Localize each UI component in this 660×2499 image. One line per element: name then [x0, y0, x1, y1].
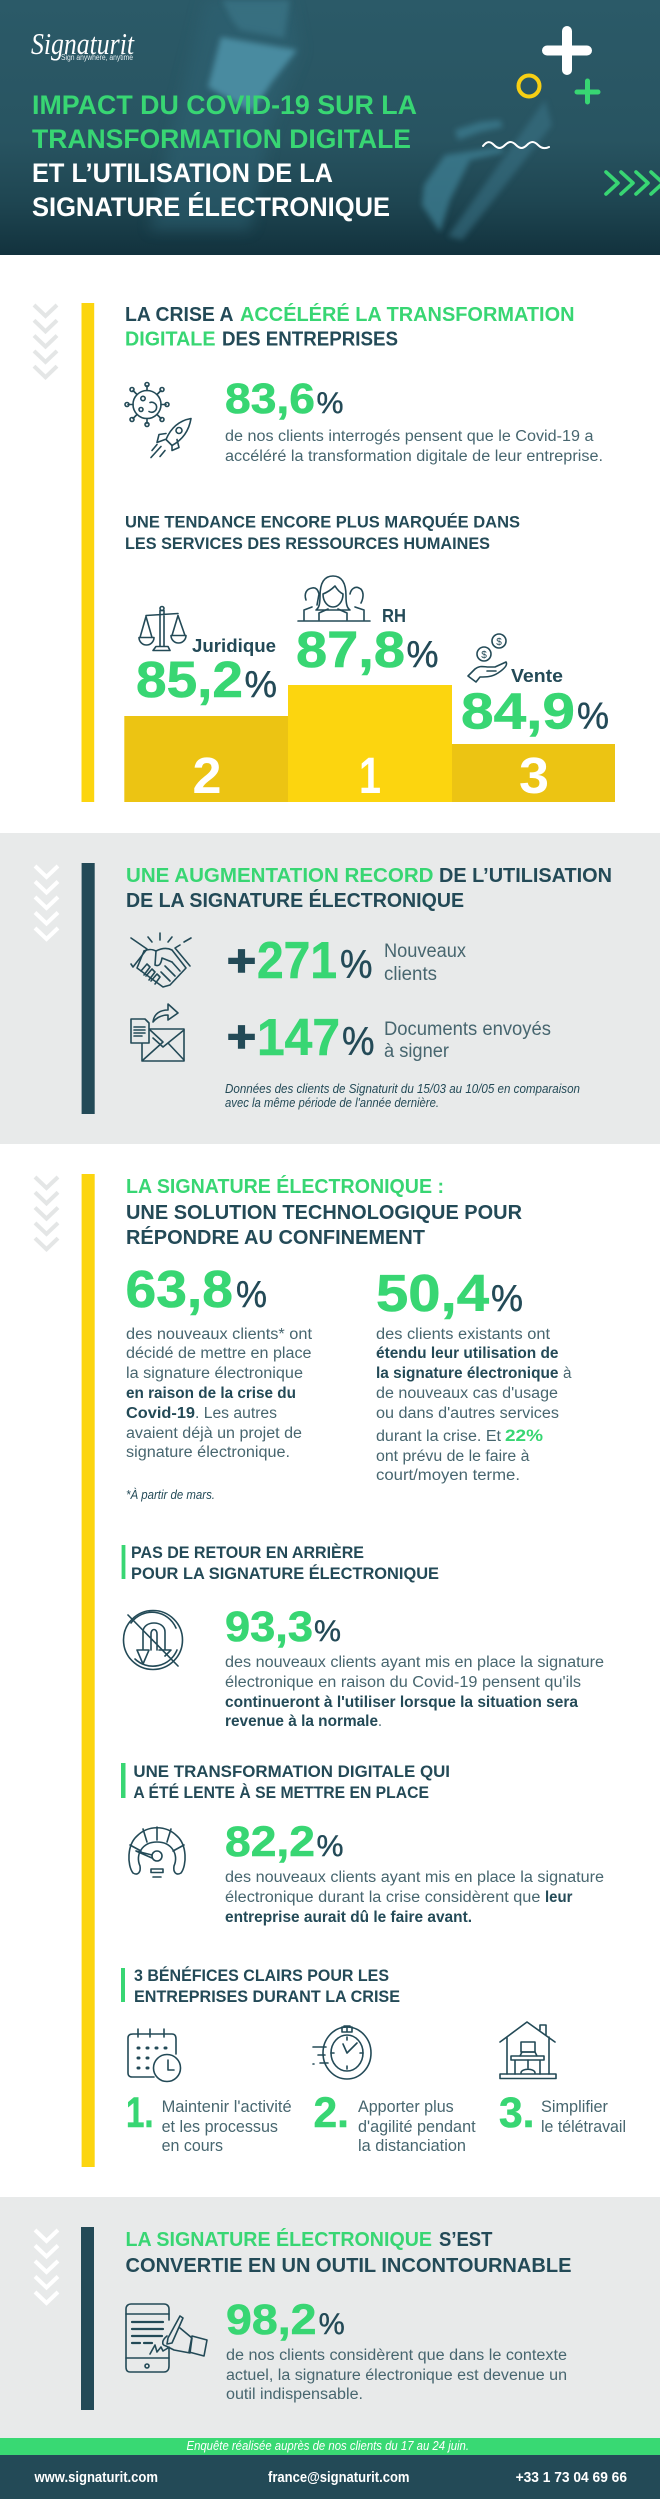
stat: 83,6%: % — [316, 387, 344, 420]
subheading: ressources humaines: LES SERVICES DES RESSOURCES HUMAINES — [125, 534, 490, 553]
stat: 83,6%: 83,6 — [225, 375, 315, 423]
subheading: pas de retour: POUR LA SIGNATURE ÉLECTRONIQUE — [131, 1564, 439, 1583]
heading: DIGITALE — [125, 328, 216, 350]
icon: calendar — [128, 2029, 180, 2082]
heading — [126, 1175, 522, 1249]
footer: +33 1 73 04 69 66 — [516, 2470, 627, 2486]
stat: 93,3%: continueront à l'utiliser lorsque la situation sera — [225, 1694, 578, 1711]
stat: 50,4%: des clients existants ont — [376, 1326, 551, 1343]
podium step 2: 2 — [192, 747, 222, 804]
value: juridique: 85,2 — [136, 651, 243, 708]
stat: 63,8%: en raison de la crise du — [126, 1385, 296, 1402]
heading: DES ENTREPRISES — [222, 328, 398, 350]
stat: 93,3% — [225, 1603, 604, 1730]
value: juridique: % — [244, 664, 277, 705]
stat: 93,3%: . — [378, 1713, 382, 1730]
value: juridique: Juridique — [192, 636, 276, 656]
title: TRANSFORMATION DIGITALE — [32, 124, 411, 154]
accent bar — [82, 1174, 95, 2167]
stat: +147% documents: à signer — [384, 1041, 450, 1062]
accent bar — [81, 2227, 94, 2410]
heading: LA CRISE A — [125, 303, 234, 326]
icon: tablet and signing hand — [126, 2304, 207, 2372]
icon: coins and hand — [468, 634, 507, 682]
stat: +147% documents — [227, 1009, 551, 1067]
value: vente: Vente — [511, 666, 563, 686]
stat: 50,4%: à — [563, 1365, 572, 1382]
stat: +147% documents: 147 — [257, 1009, 340, 1067]
value: RH: RH — [382, 606, 406, 626]
benefit 1: 1. — [126, 2089, 154, 2137]
benefit 1 — [126, 2029, 292, 2155]
value: RH: % — [406, 634, 438, 675]
footer — [0, 2455, 660, 2499]
stat: 98,2% — [226, 2296, 567, 2403]
value: juridique — [136, 636, 277, 708]
logo: Signaturit: Sign anywhere, anytime — [61, 53, 133, 62]
subheading: 3 bénéfices: ENTREPRISES DURANT LA CRISE — [134, 1987, 400, 2006]
subheading: transformation lente: A ÉTÉ LENTE À SE METTRE EN PLACE — [133, 1783, 429, 1802]
benefit 1: et les processus — [162, 2118, 278, 2136]
stat: 63,8%: % — [236, 1274, 267, 1315]
subheading: pas de retour — [122, 1543, 439, 1583]
stat: 50,4%: 50,4 — [376, 1265, 489, 1323]
stat: +271% nouveaux clients: 271 — [257, 932, 337, 990]
stat: 50,4%: durant la crise. Et — [376, 1428, 502, 1445]
title: SIGNATURE ÉLECTRONIQUE — [32, 192, 390, 222]
benefit 2: la distanciation — [358, 2137, 466, 2155]
icon: stopwatch — [313, 2026, 371, 2079]
stat: 50,4% — [376, 1265, 572, 1484]
chevrons — [35, 1177, 58, 1249]
note — [225, 1082, 580, 1110]
stat: 98,2%: de nos clients considèrent que dans le contexte — [226, 2347, 567, 2364]
stat: 63,8%: *À partir de mars. — [126, 1487, 215, 1502]
chevrons — [34, 305, 57, 377]
stat: 93,3%: des nouveaux clients ayant mis en place la signature — [225, 1654, 604, 1671]
icon: coins and hand: $ — [481, 650, 487, 661]
stat: 50,4%: ou dans d'autres services — [376, 1405, 559, 1422]
heading — [126, 2228, 572, 2277]
icon: coins and hand: $ — [496, 637, 502, 648]
stat: 93,3%: revenue à la normale — [225, 1713, 378, 1730]
footer: www.signaturit.com — [34, 2470, 158, 2486]
band: survey note: Enquête réalisée auprès de nos clients du 17 au 24 juin. — [186, 2439, 469, 2453]
benefit 2: d'agilité pendant — [358, 2118, 476, 2136]
footer: france@signaturit.com — [268, 2470, 410, 2486]
podium step 2 — [124, 716, 288, 804]
title: IMPACT DU COVID-19 SUR LA — [32, 90, 417, 120]
heading: UNE SOLUTION TECHNOLOGIQUE POUR — [126, 1201, 522, 1224]
value: vente: % — [577, 696, 609, 736]
stat: +271% nouveaux clients — [227, 932, 466, 990]
text: 83,6% description — [225, 428, 603, 465]
stat: +271% nouveaux clients: + — [227, 936, 256, 986]
value: vente — [461, 666, 609, 740]
benefit 3: le télétravail — [541, 2118, 626, 2136]
icon: envelope and document — [131, 1004, 184, 1061]
subheading: 3 bénéfices — [121, 1966, 400, 2006]
photo: masked person with tablet — [150, 0, 552, 240]
benefit 2 — [313, 2026, 476, 2155]
stat: 50,4%: la signature électronique — [376, 1365, 559, 1382]
subheading: transformation lente: UNE TRANSFORMATION DIGITALE QUI — [133, 1762, 450, 1781]
benefit 3 — [499, 2022, 626, 2137]
stat: 98,2%: outil indispensable. — [226, 2386, 363, 2403]
heading: LA SIGNATURE ÉLECTRONIQUE — [126, 2228, 432, 2251]
stat: 50,4%: 22% — [505, 1426, 543, 1445]
stat: 50,4%: de nouveaux cas d'usage — [376, 1385, 558, 1402]
stat: 82,2%: % — [316, 1830, 344, 1863]
stat: 63,8%: signature électronique. — [126, 1444, 290, 1461]
icon: scales — [139, 606, 186, 650]
logo: Signaturit: Signaturit — [31, 26, 135, 61]
decoration: plus, ring, wave, chevrons — [483, 31, 660, 194]
stat: 98,2%: 98,2 — [226, 2296, 316, 2344]
benefit 3: Simplifier — [541, 2098, 608, 2116]
icon: virus and rocket — [125, 382, 191, 458]
stat: 82,2%: des nouveaux clients ayant mis en place la signature — [225, 1869, 604, 1886]
stat: 63,8%: la signature électronique — [126, 1365, 303, 1382]
heading — [126, 864, 612, 912]
subheading: transformation lente — [121, 1762, 450, 1802]
stat: +271% nouveaux clients: % — [340, 943, 372, 987]
stat: 93,3%: électronique en raison du Covid-19 pensent qu'ils — [225, 1674, 581, 1691]
stat: 98,2%: % — [319, 2308, 345, 2341]
stat: 50,4%: court/moyen terme. — [376, 1467, 520, 1484]
subheading: ressources humaines: UNE TENDANCE ENCORE PLUS MARQUÉE DANS — [125, 512, 520, 532]
stat: +271% nouveaux clients: clients — [384, 964, 437, 985]
panel: header banner — [0, 0, 660, 255]
subheading: ressources humaines — [125, 512, 520, 553]
stat: 63,8% — [126, 1261, 313, 1502]
benefit 1: en cours — [162, 2137, 223, 2155]
band: survey note — [0, 2438, 660, 2455]
heading: CONVERTIE EN UN OUTIL INCONTOURNABLE — [126, 2254, 572, 2277]
stat: +147% documents: % — [342, 1020, 374, 1064]
stat: 82,2%: leur — [545, 1889, 572, 1906]
value: RH: 87,8 — [296, 621, 405, 678]
stat: +271% nouveaux clients: Nouveaux — [384, 941, 466, 962]
stat: +147% documents: + — [227, 1012, 256, 1062]
stat: 50,4%: étendu leur utilisation de — [376, 1345, 559, 1362]
accent bar — [82, 863, 95, 1114]
heading: UNE AUGMENTATION RECORD — [126, 864, 434, 887]
icon: handshake — [131, 933, 191, 987]
panel: outil incontournable — [0, 2197, 660, 2438]
stat: 82,2%: 82,2 — [225, 1818, 315, 1866]
stat: 63,8%: Covid-19 — [126, 1405, 195, 1422]
accent bar — [82, 303, 94, 802]
benefit 1: Maintenir l'activité — [162, 2098, 292, 2116]
heading: DE L’UTILISATION — [439, 864, 612, 887]
heading: ACCÉLÉRÉ LA TRANSFORMATION — [240, 303, 574, 326]
benefit 3: 3. — [499, 2089, 534, 2137]
podium step 3: 3 — [519, 747, 549, 804]
note: Données des clients de Signaturit du 15/03 au 10/05 en comparaison — [225, 1082, 580, 1096]
note: avec la même période de l'année dernière. — [225, 1096, 439, 1110]
panel: la crise a accéléré — [34, 303, 615, 804]
icon: house with desk — [500, 2022, 556, 2078]
icon: people — [298, 576, 370, 621]
panel: solution technologique — [35, 1174, 626, 2167]
stat: 50,4%: % — [491, 1278, 523, 1319]
stat: 98,2%: actuel, la signature électronique est devenue un — [226, 2367, 567, 2384]
benefit 2: Apporter plus — [358, 2098, 454, 2116]
value: RH — [296, 606, 438, 678]
stat: 82,2% — [225, 1818, 604, 1926]
heading: DE LA SIGNATURE ÉLECTRONIQUE — [126, 889, 464, 912]
stat: +147% documents: Documents envoyés — [384, 1019, 551, 1040]
title — [32, 90, 417, 222]
panel: augmentation record — [0, 833, 660, 1144]
value: vente: 84,9 — [461, 682, 575, 740]
icon: no return — [124, 1610, 182, 1670]
heading: RÉPONDRE AU CONFINEMENT — [126, 1226, 425, 1249]
stat: 82,2%: électronique durant la crise considèrent que — [225, 1889, 540, 1906]
stat: 63,8%: 63,8 — [126, 1261, 233, 1319]
stat: 82,2%: entreprise aurait dû le faire avant. — [225, 1909, 472, 1926]
stat: 63,8%: décidé de mettre en place — [126, 1345, 312, 1362]
stat: 63,8%: . Les autres — [195, 1405, 277, 1422]
stat: 93,3%: 93,3 — [225, 1603, 313, 1651]
podium step 1 — [288, 685, 452, 804]
stat: 63,8%: avaient déjà un projet de — [126, 1425, 302, 1442]
benefit 2: 2. — [314, 2089, 349, 2137]
text: 83,6% description: accéléré la transformation digitale de leur entreprise. — [225, 448, 603, 465]
stat: 93,3%: % — [314, 1615, 341, 1648]
subheading: pas de retour: PAS DE RETOUR EN ARRIÈRE — [131, 1543, 364, 1562]
stat: 63,8%: des nouveaux clients* ont — [126, 1326, 313, 1343]
heading: S’EST — [439, 2228, 493, 2251]
chevrons — [35, 2230, 58, 2303]
podium step 3 — [452, 744, 615, 804]
subheading: 3 bénéfices: 3 BÉNÉFICES CLAIRS POUR LES — [134, 1966, 389, 1985]
podium step 1: 1 — [359, 747, 381, 804]
heading — [125, 303, 574, 350]
chart: podium — [124, 576, 615, 804]
chevrons — [35, 866, 58, 939]
text: 83,6% description: de nos clients interrogés pensent que le Covid-19 a — [225, 428, 594, 445]
stat: 50,4%: ont prévu de le faire à — [376, 1448, 530, 1465]
title: ET L’UTILISATION DE LA — [32, 158, 333, 188]
heading: LA SIGNATURE ÉLECTRONIQUE : — [126, 1175, 444, 1198]
icon: speedometer — [129, 1827, 185, 1877]
